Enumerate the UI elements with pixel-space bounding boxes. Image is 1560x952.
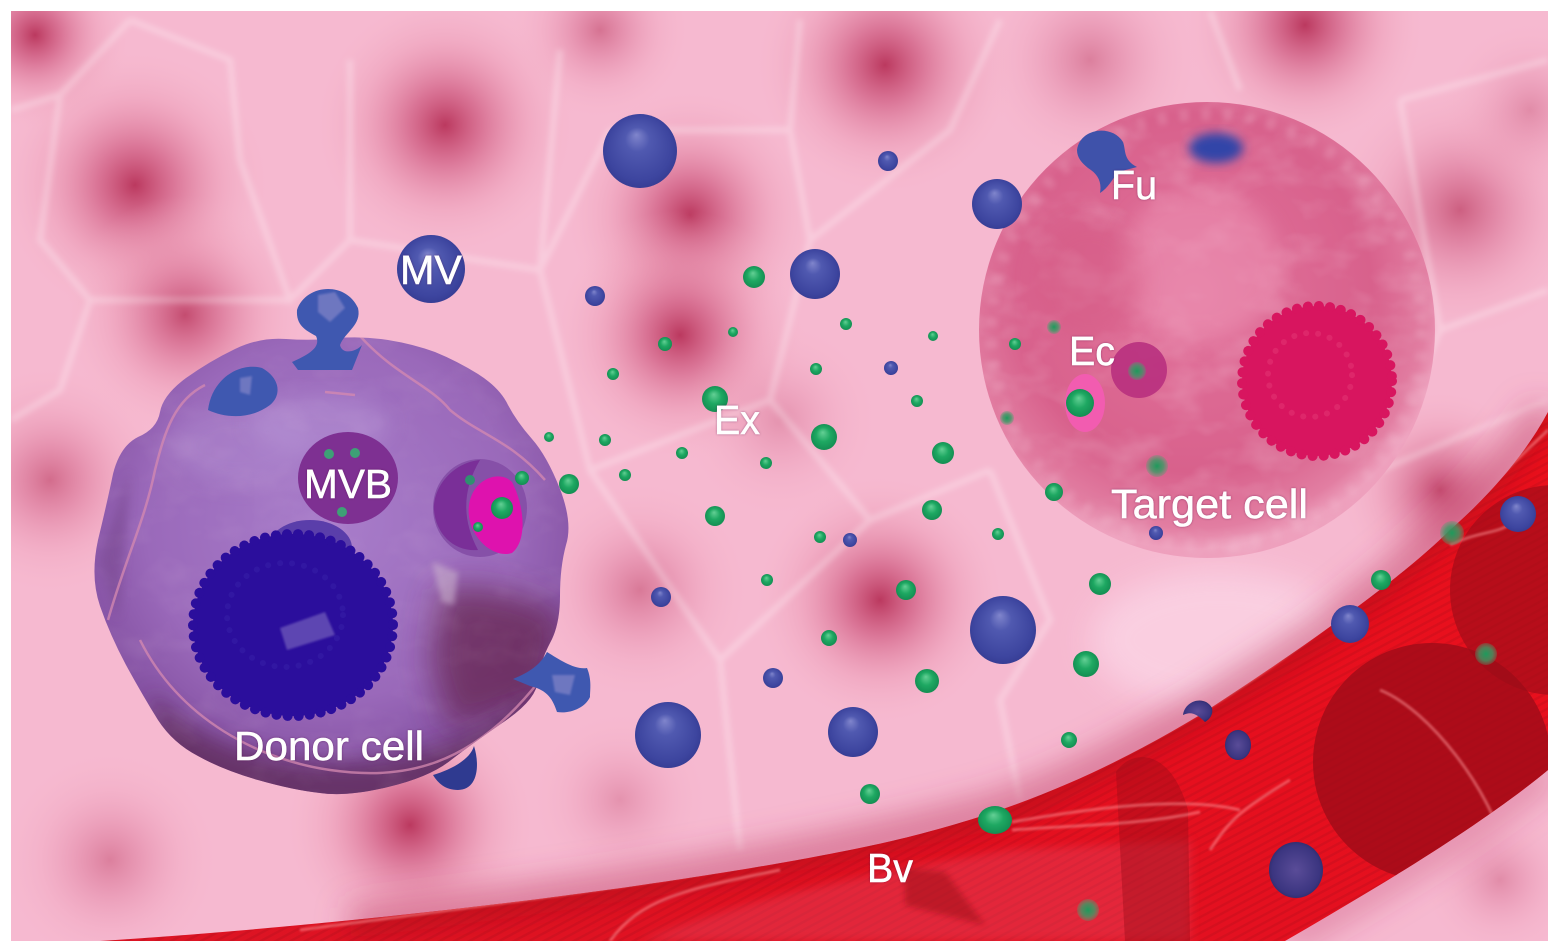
target cell [975,100,1440,560]
bud highlights [240,292,575,695]
label: Ex: Ex [714,397,760,443]
label: Bv: Bv [867,845,913,891]
multivesicular body [298,432,398,524]
target cell surface texture [975,100,1440,560]
light area below the target cell [1090,570,1350,710]
budding microvesicles on donor [208,289,590,790]
endosome in target cell [1111,342,1167,398]
vessel dark patches [905,485,1560,941]
target nucleus [1242,306,1392,456]
MVB fusing with membrane [433,459,527,557]
vessel edge shading [350,412,1548,925]
endocytosed vesicle [1065,374,1105,432]
label: Target cell: Target cell [1111,481,1308,527]
label: Ec: Ec [1069,328,1115,374]
label: Donor cell: Donor cell [234,723,424,769]
vessel shadow on tissue [350,412,1548,941]
donor cell [85,289,590,810]
faded green exosomes [1000,320,1497,921]
blue extracellular vesicles [397,114,1536,768]
green exosomes [515,266,1391,834]
label: MV: MV [400,247,463,293]
vesicles inside the vessel [1183,701,1323,898]
donor nucleus [193,520,393,716]
blood vessel [90,400,1560,945]
vessel dusky lower band [640,840,1190,941]
label: Fu: Fu [1111,162,1157,208]
donor shading and ridges [85,330,580,810]
faded blue vesicle fusing [1189,133,1243,163]
vessel wall highlights [300,430,1548,941]
fusing vesicle [1077,131,1137,193]
label: MVB: MVB [304,461,392,507]
